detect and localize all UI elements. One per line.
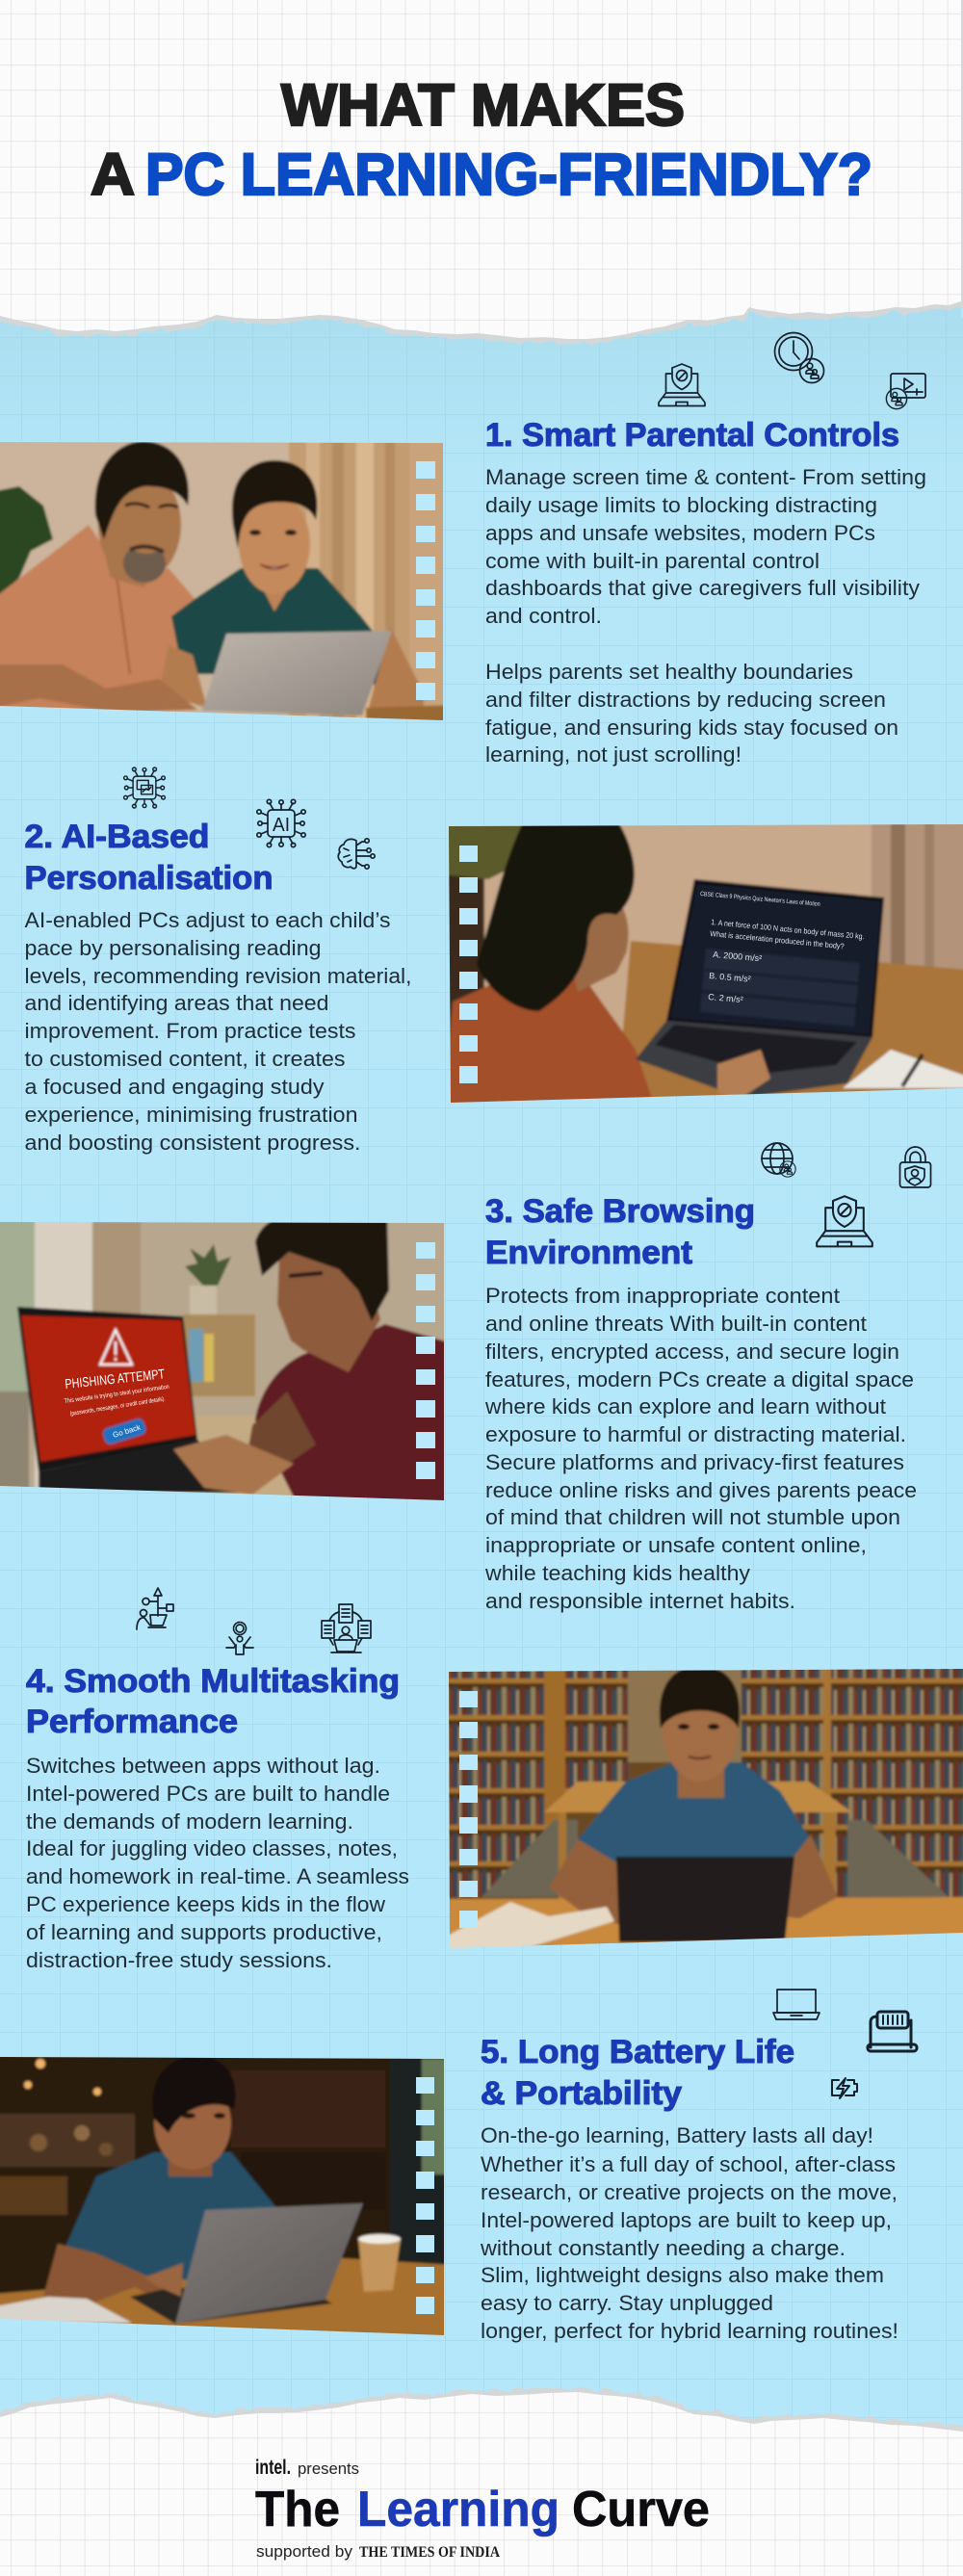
text block 3: of mind that children will not stumble upon	[485, 1505, 900, 1529]
icon: video with people	[886, 374, 925, 409]
icon: padlock with user	[899, 1147, 930, 1187]
title: PC LEARNING-FRIENDLY?	[145, 142, 872, 207]
text block 4: Ideal for juggling video classes, notes,	[26, 1836, 398, 1860]
text block 4: PC experience keeps kids in the flow	[26, 1892, 385, 1916]
text block 2: and identifying areas that need	[25, 991, 329, 1015]
supported by	[256, 2542, 501, 2561]
text block 5: easy to carry. Stay unplugged	[481, 2291, 773, 2315]
heading 2: Personalisation	[25, 860, 273, 897]
text block 4: and homework in real-time. A seamless	[26, 1864, 409, 1888]
text block 1: come with built-in parental control	[485, 549, 820, 573]
text block 1: dashboards that give caregivers full visibility	[485, 576, 920, 600]
photo: boy working in cafe	[0, 2051, 453, 2340]
text block 5: research, or creative projects on the move,	[481, 2180, 898, 2204]
text block 3	[484, 1284, 917, 1613]
text block 2: improvement. From practice tests	[25, 1019, 356, 1043]
heading 2	[25, 819, 273, 897]
quiz screen text: C. 2 m/s²	[708, 992, 743, 1004]
text block 3: filters, encrypted access, and secure login	[485, 1340, 899, 1364]
icon: laptop with battery	[868, 2012, 917, 2051]
text block 4	[26, 1754, 409, 1972]
phishing screen text: PHISHING ATTEMPT	[65, 1366, 166, 1392]
quiz screen text: 1. A net force of 100 N acts on body of mass 20 kg.	[711, 918, 865, 941]
text block 2: to customised content, it creates	[25, 1047, 345, 1071]
heading 3	[485, 1193, 755, 1271]
icon: person with gear	[226, 1622, 253, 1654]
icon: globe with people	[762, 1143, 795, 1177]
photo: father and son at laptop	[0, 433, 453, 727]
text block 3: exposure to harmful or distracting material.	[485, 1422, 906, 1446]
text block 5: without constantly needing a charge.	[480, 2236, 846, 2260]
icon: laptop	[773, 1990, 820, 2019]
icon: AI chip	[257, 799, 305, 847]
phishing screen text: This website is trying to steal your information	[64, 1384, 170, 1405]
text block 1: and control.	[485, 604, 602, 628]
heading 2: 2. AI-Based	[25, 819, 210, 855]
supported by: THE TIMES OF INDIA	[359, 2544, 501, 2561]
heading 5	[481, 2034, 794, 2112]
icon: person with workflow	[137, 1588, 173, 1629]
icon: chip with chart	[124, 768, 165, 808]
icon: laptop shield	[817, 1196, 872, 1246]
text block 1: daily usage limits to blocking distracting	[485, 493, 877, 517]
title	[91, 72, 872, 207]
text block 2: and boosting consistent progress.	[25, 1131, 360, 1155]
phishing screen text: (passwords, messages, or credit card details).	[69, 1395, 166, 1418]
icon: brain circuit	[338, 839, 375, 869]
quiz screen text: A. 2000 m/s²	[713, 950, 763, 963]
text block 4: Intel-powered PCs are built to handle	[26, 1782, 390, 1806]
icon: charging battery	[832, 2078, 857, 2098]
text block 3: and responsible internet habits.	[485, 1589, 795, 1613]
text block 2: experience, minimising frustration	[25, 1103, 358, 1127]
text block 2: levels, recommending revision material,	[25, 964, 412, 988]
supported by: supported by	[256, 2542, 353, 2561]
quiz screen text: What is acceleration produced in the body?	[710, 929, 846, 950]
text block 1: Helps parents set healthy boundaries	[485, 660, 853, 684]
text block 1: learning, not just scrolling!	[485, 742, 742, 767]
heading 3: Environment	[485, 1235, 692, 1271]
heading 5: & Portability	[481, 2075, 682, 2112]
text block 3: Protects from inappropriate content	[485, 1284, 840, 1308]
title: WHAT MAKES	[281, 72, 685, 138]
text block 5: Whether it’s a full day of school, after-class	[481, 2152, 896, 2176]
series title: Curve	[572, 2482, 710, 2537]
text block 5: Slim, lightweight designs also make them	[481, 2263, 884, 2287]
intel presents: presents	[298, 2459, 359, 2478]
text block 1	[485, 465, 926, 767]
text block 3: Secure platforms and privacy-first features	[485, 1450, 904, 1474]
series title: Learning	[357, 2482, 560, 2537]
text block 5	[480, 2123, 898, 2343]
intel presents	[255, 2457, 359, 2479]
heading 3: 3. Safe Browsing	[485, 1193, 755, 1230]
intel presents: intel.	[255, 2457, 291, 2479]
torn paper header	[0, 0, 963, 344]
heading 1: 1. Smart Parental Controls	[485, 417, 899, 454]
text block 2: AI-enabled PCs adjust to each child’s	[25, 908, 391, 932]
panel: section 1 smart parental controls	[0, 333, 926, 767]
text block 3: reduce online risks and gives parents peace	[485, 1478, 917, 1502]
text block 3: features, modern PCs create a digital space	[485, 1367, 914, 1392]
text block 5: longer, perfect for hybrid learning routines!	[481, 2319, 898, 2343]
heading 5: 5. Long Battery Life	[481, 2034, 794, 2070]
torn paper footer	[0, 2387, 963, 2576]
text block 2	[25, 908, 412, 1155]
footer branding	[255, 2457, 710, 2561]
icon: laptop shield	[659, 364, 705, 406]
photo: girl taking a quiz on laptop	[443, 814, 963, 1107]
text block 4: distraction-free study sessions.	[26, 1948, 332, 1972]
text block 3: and online threats With built-in content	[485, 1312, 867, 1336]
photo: boy in library	[443, 1661, 963, 1955]
heading 4: 4. Smooth Multitasking	[26, 1663, 400, 1700]
phishing screen text	[64, 1366, 170, 1440]
text block 1: and filter distractions by reducing screen	[485, 688, 886, 712]
quiz screen text	[700, 891, 865, 1004]
photo: boy seeing phishing warning	[0, 1213, 453, 1507]
text block 3: where kids can explore and learn without	[484, 1394, 886, 1418]
quiz screen text: B. 0.5 m/s²	[709, 971, 751, 984]
text block 1: fatigue, and ensuring kids stay focused on	[485, 716, 898, 740]
panel: section 3 safe browsing environment	[0, 1143, 930, 1613]
text block 5: On-the-go learning, Battery lasts all day!	[481, 2123, 873, 2147]
heading 4	[26, 1663, 400, 1740]
icon: person at podium with documents	[322, 1604, 371, 1652]
text block 5: Intel-powered laptops are built to keep up,	[481, 2208, 892, 2232]
title: A	[91, 142, 135, 207]
text block 3: while teaching kids healthy	[484, 1561, 750, 1585]
text block 4: Switches between apps without lag.	[26, 1754, 380, 1778]
panel: section 4 smooth multitasking performance	[26, 1588, 963, 1972]
series title: The	[255, 2482, 340, 2537]
panel: section 2 AI-based personalisation	[25, 768, 963, 1155]
text block 4: the demands of modern learning.	[26, 1809, 353, 1834]
text block 2: a focused and engaging study	[25, 1075, 324, 1099]
text block 1: apps and unsafe websites, modern PCs	[485, 521, 875, 545]
icon: AI chip: AI	[273, 815, 290, 836]
quiz screen text: CBSE Class 9 Physics Quiz Newton's Laws of Motion	[700, 891, 820, 908]
text block 1: Manage screen time & content- From setting	[485, 465, 926, 489]
series title	[255, 2482, 710, 2537]
text block 3: inappropriate or unsafe content online,	[485, 1533, 867, 1557]
icon: clock with people	[774, 333, 824, 383]
panel: section 5 long battery life and portability	[0, 1990, 917, 2343]
text block 4: of learning and supports productive,	[26, 1920, 382, 1944]
text block 2: pace by personalising reading	[25, 936, 322, 960]
phishing screen text: Go back	[112, 1422, 143, 1440]
heading 4: Performance	[26, 1704, 238, 1740]
